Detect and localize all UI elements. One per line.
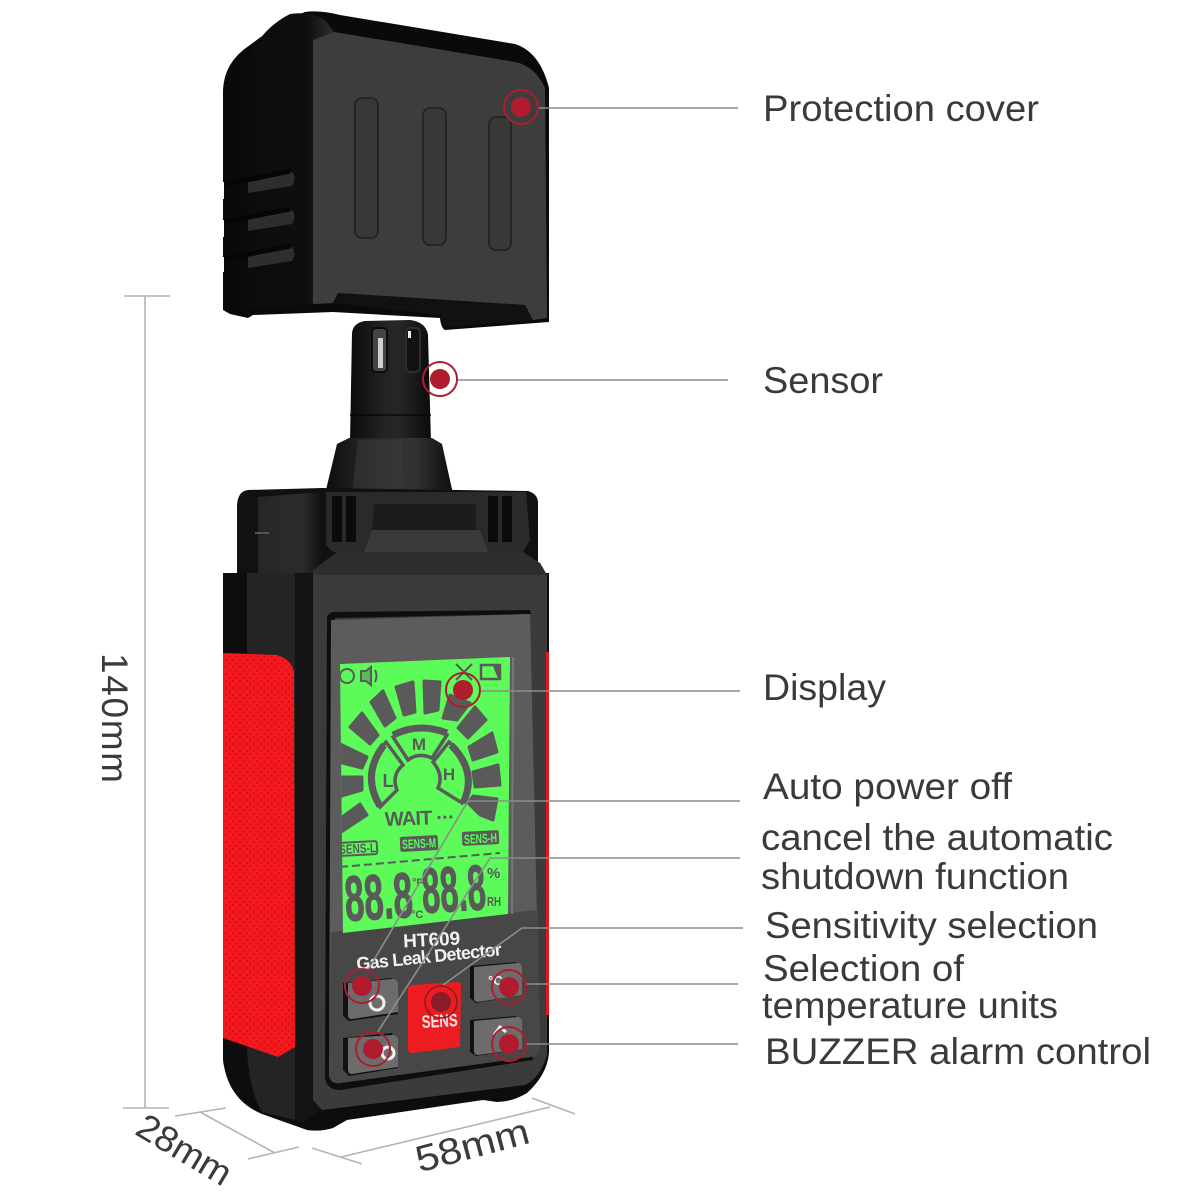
model name: HT609 [403, 929, 461, 952]
gauge labels [384, 738, 454, 787]
cover vent slots [355, 98, 511, 250]
display panel [325, 610, 540, 1090]
callout: sensor: Sensor [763, 360, 883, 401]
gauge labels: L [382, 771, 394, 791]
dimension: height 140mm [94, 296, 170, 1108]
red side grip [223, 653, 295, 1057]
status icons [340, 664, 500, 685]
mode button [343, 1033, 398, 1076]
cover grip grooves [221, 171, 294, 272]
callout: buzzer alarm control: BUZZER alarm control [765, 1031, 1151, 1072]
red right strip [546, 652, 549, 1015]
unit labels: RH [487, 894, 501, 909]
sensitivity labels: SENS-H [464, 830, 497, 847]
callout: cancel the automatic shutdown function: cancel the automatic [761, 817, 1113, 858]
humidity reading: 88.8 [419, 851, 488, 927]
callout: sensor [423, 360, 883, 401]
sensitivity labels [338, 830, 499, 857]
temperature unit button [470, 962, 522, 1003]
unit labels [412, 868, 500, 918]
callout: auto power off [345, 766, 1013, 1003]
unit labels: % [487, 865, 500, 882]
icon: detector body [223, 488, 549, 1131]
SENS button [408, 982, 461, 1053]
buzzer button [470, 1016, 522, 1056]
callout: cancel the automatic shutdown function: shutdown function [761, 856, 1069, 897]
unit labels: °C [411, 909, 423, 921]
unit labels: °F [412, 877, 423, 889]
temperature unit button: °C [488, 973, 503, 988]
dimension: width 58mm: 58mm [411, 1111, 534, 1180]
callout: protection cover [504, 88, 1039, 129]
icon: sensor probe [325, 320, 453, 494]
device top collar [237, 488, 538, 575]
dimension: depth 28mm [129, 1105, 299, 1194]
callout: display [446, 667, 886, 708]
product name: Gas Leak Detector [355, 939, 503, 974]
temperature reading: 88.8 [342, 859, 415, 935]
callout: selection of temperature units: Selection of [763, 948, 965, 989]
callout: sensitivity selection [425, 905, 1098, 1018]
SENS button: SENS [421, 1010, 458, 1032]
dimension: width 58mm [312, 1098, 575, 1180]
power button [343, 978, 398, 1021]
LCD screen [338, 657, 513, 935]
gauge segments [338, 681, 500, 834]
dimension: depth 28mm: 28mm [129, 1105, 240, 1194]
sensitivity labels: SENS-M [402, 835, 436, 852]
callout: cancel the automatic shutdown function [356, 817, 1113, 1066]
callout: display: Display [763, 667, 886, 708]
dimension: height 140mm: 140mm [94, 653, 135, 783]
callout: sensitivity selection: Sensitivity selection [765, 905, 1098, 946]
gauge labels: M [412, 735, 426, 754]
wait indicator: WAIT ··· [384, 807, 455, 831]
callout: selection of temperature units: temperature units [762, 985, 1058, 1026]
callout: selection of temperature units [492, 948, 1058, 1026]
callout: buzzer alarm control [492, 1027, 1151, 1072]
sensitivity labels: SENS-L [339, 840, 376, 857]
gauge sensitivity sectors L M H [371, 729, 470, 807]
gauge labels: H [443, 765, 455, 784]
callout: auto power off: Auto power off [763, 766, 1013, 807]
device main shell [223, 573, 549, 1131]
callout: protection cover: Protection cover [763, 88, 1039, 129]
icon: protection cover [221, 11, 549, 330]
